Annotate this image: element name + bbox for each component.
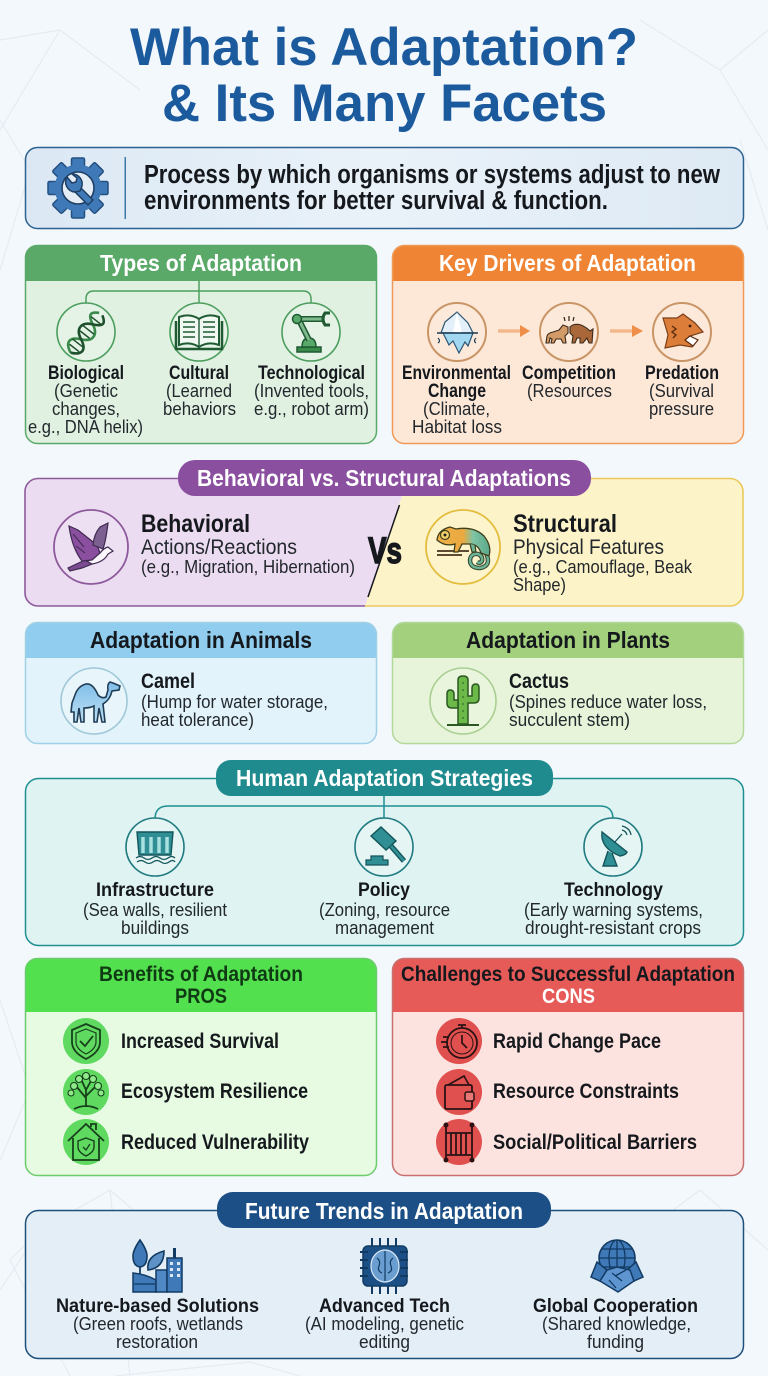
heading pill: human strategies: Human Adaptation Strategies (236, 765, 533, 791)
text: biological: e.g., DNA helix) (28, 416, 143, 437)
text: technological: e.g., robot arm) (254, 398, 369, 419)
text: global cooperation: Global Cooperation (533, 1296, 698, 1317)
text: cultural (163, 363, 236, 419)
heading: challenges (392, 958, 744, 1012)
text: behavioral: Behavioral (141, 510, 250, 538)
panel: types of adaptation (25, 245, 377, 444)
text: global cooperation: funding (587, 1331, 644, 1352)
text: environmental change (402, 363, 511, 437)
title (130, 18, 638, 133)
panel: plants (392, 622, 744, 744)
text: policy: Policy (358, 880, 410, 901)
text: nature-based solutions: (Green roofs, wetlands (73, 1313, 243, 1334)
title: & Its Many Facets (162, 74, 607, 133)
text: camel (141, 670, 328, 730)
heading: plants (392, 622, 744, 658)
icon: shield (63, 1018, 109, 1064)
text: predation (645, 363, 719, 419)
text: advanced tech: editing (359, 1331, 410, 1352)
text: cultural: behaviors (163, 398, 236, 419)
heading: plants: Adaptation in Plants (466, 627, 670, 653)
text: benefits list: Increased Survival (121, 1029, 279, 1053)
text: cultural: Cultural (169, 363, 229, 384)
icon: dove (54, 510, 128, 584)
text: global cooperation: (Shared knowledge, (542, 1313, 691, 1334)
text: competition (522, 363, 616, 401)
text: predation: (Survival (649, 380, 714, 401)
heading pill: future trends (217, 1192, 551, 1228)
text: environmental change: Habitat loss (412, 416, 502, 437)
text: infrastructure: buildings (121, 917, 189, 938)
arrow: drivers 1 (498, 325, 530, 337)
text: structural: Structural (513, 510, 617, 538)
text: technological: (Invented tools, (254, 380, 369, 401)
text: technology: (Early warning systems, (524, 899, 703, 920)
icon: sea wall (126, 818, 184, 876)
text: nature-based solutions: Nature-based Solutions (56, 1296, 259, 1317)
heading pill: future trends: Future Trends in Adaptation (245, 1198, 523, 1224)
heading: key drivers: Key Drivers of Adaptation (439, 250, 696, 276)
text: camel: Camel (141, 670, 195, 693)
panel: behavioral vs structural (25, 460, 743, 606)
icon: satellite dish (584, 818, 642, 876)
panel: future trends (26, 1192, 744, 1358)
text: structural: Shape) (513, 574, 566, 595)
text: global cooperation (533, 1296, 698, 1352)
text: environmental change: (Climate, (423, 398, 490, 419)
arrow: drivers 2 (610, 325, 643, 337)
text: challenges list: Resource Constraints (493, 1079, 679, 1103)
text: benefits list: Ecosystem Resilience (121, 1079, 308, 1103)
text: technological: Technological (258, 363, 365, 384)
text: advanced tech (305, 1296, 464, 1352)
text: challenges list: Social/Political Barriers (493, 1130, 697, 1154)
panel: definition (26, 148, 744, 228)
text: biological: changes, (52, 398, 120, 419)
heading: types of adaptation (25, 245, 377, 281)
icon: stopwatch (436, 1018, 482, 1064)
text: challenges list: Rapid Change Pace (493, 1029, 661, 1053)
text: technological (254, 363, 369, 419)
text: camel: heat tolerance) (141, 709, 254, 730)
icon: competing animals (540, 303, 598, 361)
text: structural (513, 510, 693, 595)
text: environmental change: Environmental (402, 363, 511, 384)
text: predation: pressure (649, 398, 714, 419)
heading: benefits: PROS (175, 984, 227, 1008)
icon: cactus (430, 668, 496, 734)
text: behavioral: Actions/Reactions (141, 536, 297, 559)
text: benefits list: Reduced Vulnerability (121, 1130, 309, 1154)
text: cactus: Cactus (509, 670, 569, 693)
text: cactus: (Spines reduce water loss, (509, 691, 707, 712)
vs mark: Vs (368, 530, 402, 571)
panel: benefits (25, 958, 377, 1176)
text: environmental change: Change (428, 381, 486, 402)
text: nature-based solutions (56, 1296, 259, 1352)
heading: benefits (25, 958, 377, 1012)
text: cactus (509, 670, 707, 730)
text: policy: management (335, 917, 434, 938)
icon: gavel (355, 818, 413, 876)
heading pill: human strategies (216, 760, 553, 796)
text: predation: Predation (645, 363, 719, 384)
definition text (144, 161, 720, 215)
text: infrastructure: (Sea walls, resilient (83, 899, 227, 920)
icon: chameleon (426, 510, 500, 584)
icon: green city (133, 1240, 182, 1292)
icon: barrier gate (436, 1119, 482, 1165)
text: cultural: (Learned (166, 380, 232, 401)
text: policy: (Zoning, resource (319, 899, 450, 920)
text: advanced tech: Advanced Tech (319, 1296, 450, 1317)
icon: gear and wrench (48, 158, 108, 218)
text: behavioral (141, 510, 355, 577)
heading: animals (25, 622, 377, 658)
icon: DNA helix (57, 303, 115, 361)
icon: tree (63, 1069, 109, 1115)
text: infrastructure: Infrastructure (96, 880, 214, 901)
text: camel: (Hump for water storage, (141, 691, 328, 712)
text: biological (28, 363, 143, 437)
text: technology: drought-resistant crops (525, 917, 701, 938)
text: biological: (Genetic (54, 380, 118, 401)
heading: benefits: Benefits of Adaptation (99, 962, 303, 986)
heading: challenges: CONS (542, 984, 595, 1008)
heading: challenges: Challenges to Successful Adaptation (401, 962, 735, 986)
text: benefits list (121, 1029, 309, 1154)
text: structural: (e.g., Camouflage, Beak (513, 556, 693, 577)
icon: open book (170, 303, 228, 361)
text: infrastructure (83, 880, 227, 938)
icon: house with shield (63, 1119, 109, 1165)
heading pill: behavioral vs structural (178, 460, 591, 496)
icon: robot arm (282, 303, 340, 361)
text: behavioral: (e.g., Migration, Hibernation) (141, 556, 355, 577)
heading: key drivers (392, 245, 744, 281)
text: competition: Competition (522, 363, 616, 384)
text: technology: Technology (564, 880, 663, 901)
text: technology (524, 880, 703, 938)
text: challenges list (493, 1029, 697, 1154)
icon: wallet (436, 1069, 482, 1115)
text: biological: Biological (48, 363, 124, 384)
text: competition: (Resources (527, 380, 612, 401)
icon: globe handshake (591, 1240, 643, 1292)
icon: AI brain chip (360, 1238, 408, 1294)
title: What is Adaptation? (130, 18, 638, 77)
text: advanced tech: (AI modeling, genetic (305, 1313, 464, 1334)
panel: human strategies (26, 760, 744, 946)
heading: types of adaptation: Types of Adaptation (100, 250, 302, 276)
text: structural: Physical Features (513, 536, 664, 559)
panel: key drivers (392, 245, 744, 444)
heading pill: behavioral vs structural: Behavioral vs. Structural Adaptations (197, 465, 571, 491)
icon: predator head (653, 303, 711, 361)
icon: iceberg (428, 303, 486, 361)
panel: animals (25, 622, 377, 744)
panel: challenges (392, 958, 744, 1176)
definition text: environments for better survival & function. (144, 187, 608, 215)
icon: camel (61, 668, 127, 734)
text: cactus: succulent stem) (509, 709, 630, 730)
heading: animals: Adaptation in Animals (90, 627, 312, 653)
text: nature-based solutions: restoration (116, 1331, 198, 1352)
text: policy (319, 880, 450, 938)
